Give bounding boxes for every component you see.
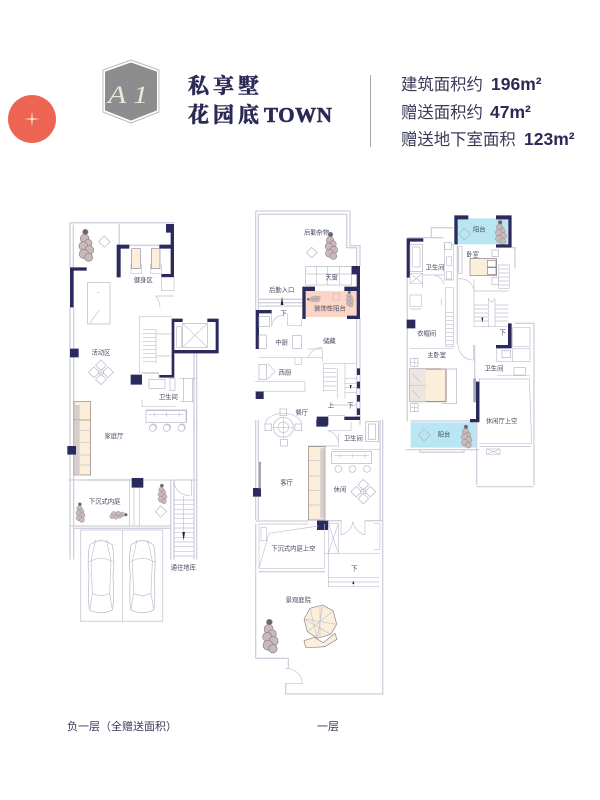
basement lower section: 家庭厅 xyxy=(105,431,124,440)
title: TOWN xyxy=(264,103,333,127)
basement upper section xyxy=(70,223,219,431)
first floor lower section: 休闲 xyxy=(334,484,346,493)
floor plan: second floor: 主卧室 xyxy=(427,350,446,359)
first floor upper section: 下 xyxy=(347,402,353,410)
first floor upper section: 餐厅 xyxy=(295,407,309,416)
area figures: 赠送地下室面积 xyxy=(401,131,516,149)
basement upper section: 健身区 xyxy=(134,275,153,284)
floor plan: second floor: 卧室 xyxy=(466,249,479,258)
first floor lower section: 景观庭院 xyxy=(286,595,312,604)
floor plan: second floor: 卫生间 xyxy=(484,363,503,372)
first floor upper section: 储藏 xyxy=(323,336,336,345)
first floor upper section: 天窗 xyxy=(325,273,338,282)
basement lower section: 下沉式内庭 xyxy=(89,497,121,506)
first floor upper section: 上 xyxy=(328,401,335,410)
basement upper section: 活动区 xyxy=(92,347,111,356)
floor plan: second floor xyxy=(406,215,534,487)
area figures: 赠送面积约 xyxy=(401,104,483,122)
first floor upper section: 下 xyxy=(280,309,287,317)
divider xyxy=(370,75,371,147)
first floor lower section: 客厅 xyxy=(280,477,294,486)
floor plan: second floor: 下 xyxy=(499,328,506,336)
badge: plus circle xyxy=(8,95,56,143)
area figures: 建筑面积约 xyxy=(401,76,483,94)
first floor lower section xyxy=(253,417,383,695)
title xyxy=(188,74,333,127)
first floor lower section: 下 xyxy=(351,565,357,573)
floor plan: basement xyxy=(67,223,219,621)
area figures xyxy=(401,74,575,149)
balcony: lower: 阳台 xyxy=(438,430,450,439)
floor plan: second floor: 休闲厅上空 xyxy=(486,416,517,425)
basement lower section: 通往地库 xyxy=(171,562,197,571)
first floor upper section: 后勤入口 xyxy=(269,285,294,294)
first floor lower section: 下沉式内庭上空 xyxy=(271,543,315,552)
area figures: 123m² xyxy=(524,129,575,149)
balcony: upper xyxy=(454,215,512,248)
basement upper section: 卫生间 xyxy=(159,392,178,401)
title: 花园底 xyxy=(188,103,263,127)
balcony: upper: 阳台 xyxy=(473,225,486,234)
first floor upper section: 装饰性阳台 xyxy=(314,304,346,313)
area figures: 196m² xyxy=(491,74,542,94)
floor plan: first floor xyxy=(253,211,383,695)
label: basement: 负一层（全赠送面积） xyxy=(67,719,177,733)
balcony: lower xyxy=(406,421,479,450)
badge: A1 hexagon xyxy=(103,60,159,123)
first floor lower section: 卫生间 xyxy=(344,433,363,442)
basement lower section xyxy=(67,411,198,621)
first floor upper section: 西厨 xyxy=(279,368,292,376)
title: 私享墅 xyxy=(188,74,263,98)
label: first floor: 一层 xyxy=(317,720,339,733)
floor plan: second floor: 衣帽间 xyxy=(417,329,436,338)
first floor upper section: 中厨 xyxy=(275,337,289,346)
area figures: 47m² xyxy=(490,102,531,122)
badge: A1 hexagon: A 1 xyxy=(106,82,148,109)
floor plan: second floor: 卫生间 xyxy=(426,262,444,271)
first floor upper section xyxy=(255,211,360,425)
first floor upper section: 后勤杂物 xyxy=(304,227,330,236)
